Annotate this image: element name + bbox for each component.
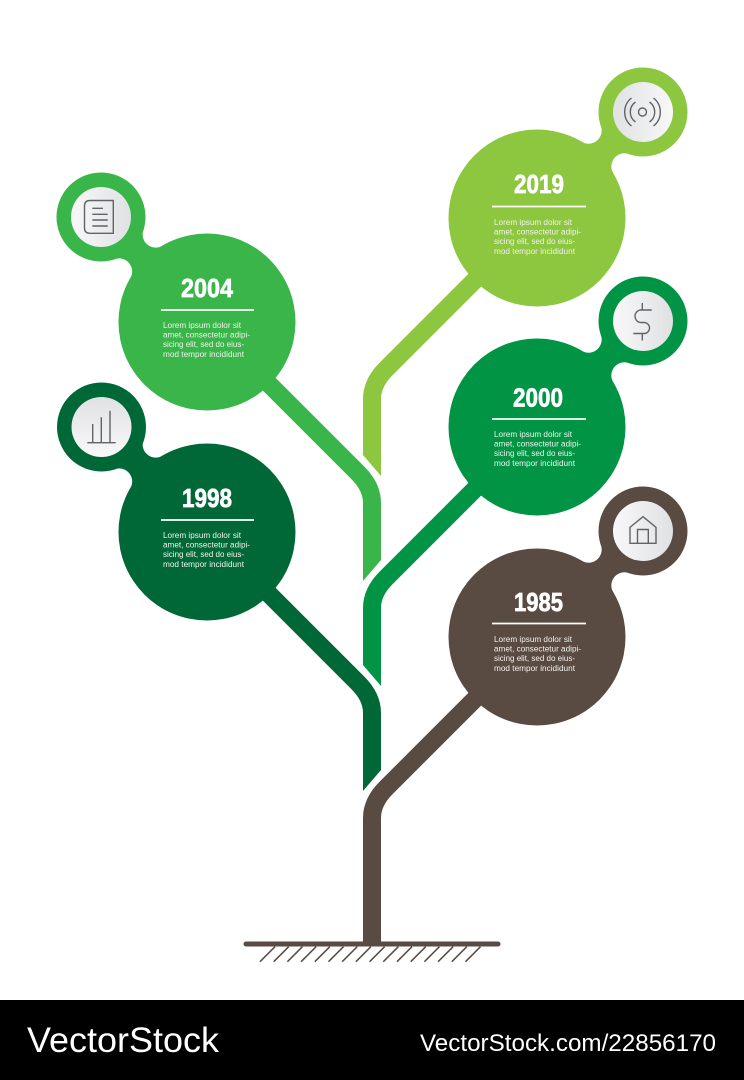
connector: 2004 [101,217,207,322]
branch: 1998 [207,532,381,791]
connector: 2000 [537,321,643,427]
connector: 2019 [537,112,643,218]
text block: 1985: amet, consectetur adipi- [494,645,581,654]
year: 2000: 2000 [513,382,563,412]
connector: 1998 [102,427,207,532]
text block: 2000: Lorem ipsum dolor sit [494,430,573,439]
ground line with hatching [246,944,498,962]
year: 1998: 1998 [182,483,232,513]
text block: 2019: mod tempor incididunt [494,247,576,256]
icon ring: document [56,172,146,262]
text block: 1985: mod tempor incididunt [494,664,576,673]
text block: 1985: sicing elit, sed do eius- [494,654,575,663]
text block: 2019: Lorem ipsum dolor sit [494,218,573,227]
panel: 2004 milestone [56,172,381,581]
icon ring: bar chart [57,382,146,472]
year: 2004: 2004 [181,273,233,303]
text block: 2019 [494,218,581,256]
circle: 1998 [118,444,296,620]
text block: 2004: mod tempor incididunt [163,350,245,359]
text block: 2000 [494,430,581,468]
year: 2019: 2019 [514,169,564,199]
text block: 2000: amet, consectetur adipi- [494,440,581,449]
panel: 1985 milestone [372,486,688,946]
text block: 2004: amet, consectetur adipi- [163,331,250,340]
footer bar [0,1000,744,1080]
text block: 1985: Lorem ipsum dolor sit [494,635,573,644]
icon ring: dollar [598,276,688,366]
text block: 2019: sicing elit, sed do eius- [494,237,575,246]
text block: 2004: sicing elit, sed do eius- [163,340,244,349]
text block: 1998: mod tempor incididunt [163,560,245,569]
year: 1985: 1985 [514,587,563,617]
text block: 2000: sicing elit, sed do eius- [494,449,575,458]
panel: 2000 milestone [363,276,688,686]
icon ring: house [598,486,688,576]
circle: 1985 [448,548,626,726]
circle: 2000 [448,338,626,516]
panel: 1998 milestone [57,382,381,791]
text block: 1998: Lorem ipsum dolor sit [163,531,242,540]
branch: 2019 [363,218,537,476]
trunk: 1985 [372,637,537,946]
footer image id text: VectorStock.com/22856170 [420,1030,716,1057]
connector: 1985 [537,531,643,637]
text block: 1985 [494,635,581,673]
text block: 2019: amet, consectetur adipi- [494,228,581,237]
footer logo text: VectorStock [27,1021,220,1060]
text block: 1998: amet, consectetur adipi- [163,541,250,550]
branch: 2000 [363,427,537,686]
panel: 2019 milestone [363,68,688,476]
circle: 2019 [448,130,626,306]
text block: 2004: Lorem ipsum dolor sit [163,321,242,330]
text block: 1998: sicing elit, sed do eius- [163,550,244,559]
circle: 2004 [118,234,296,410]
text block: 1998 [163,531,250,569]
icon ring: signal [598,68,688,156]
branch: 2004 [207,322,381,581]
text block: 2000: mod tempor incididunt [494,459,576,468]
text block: 2004 [163,321,250,359]
